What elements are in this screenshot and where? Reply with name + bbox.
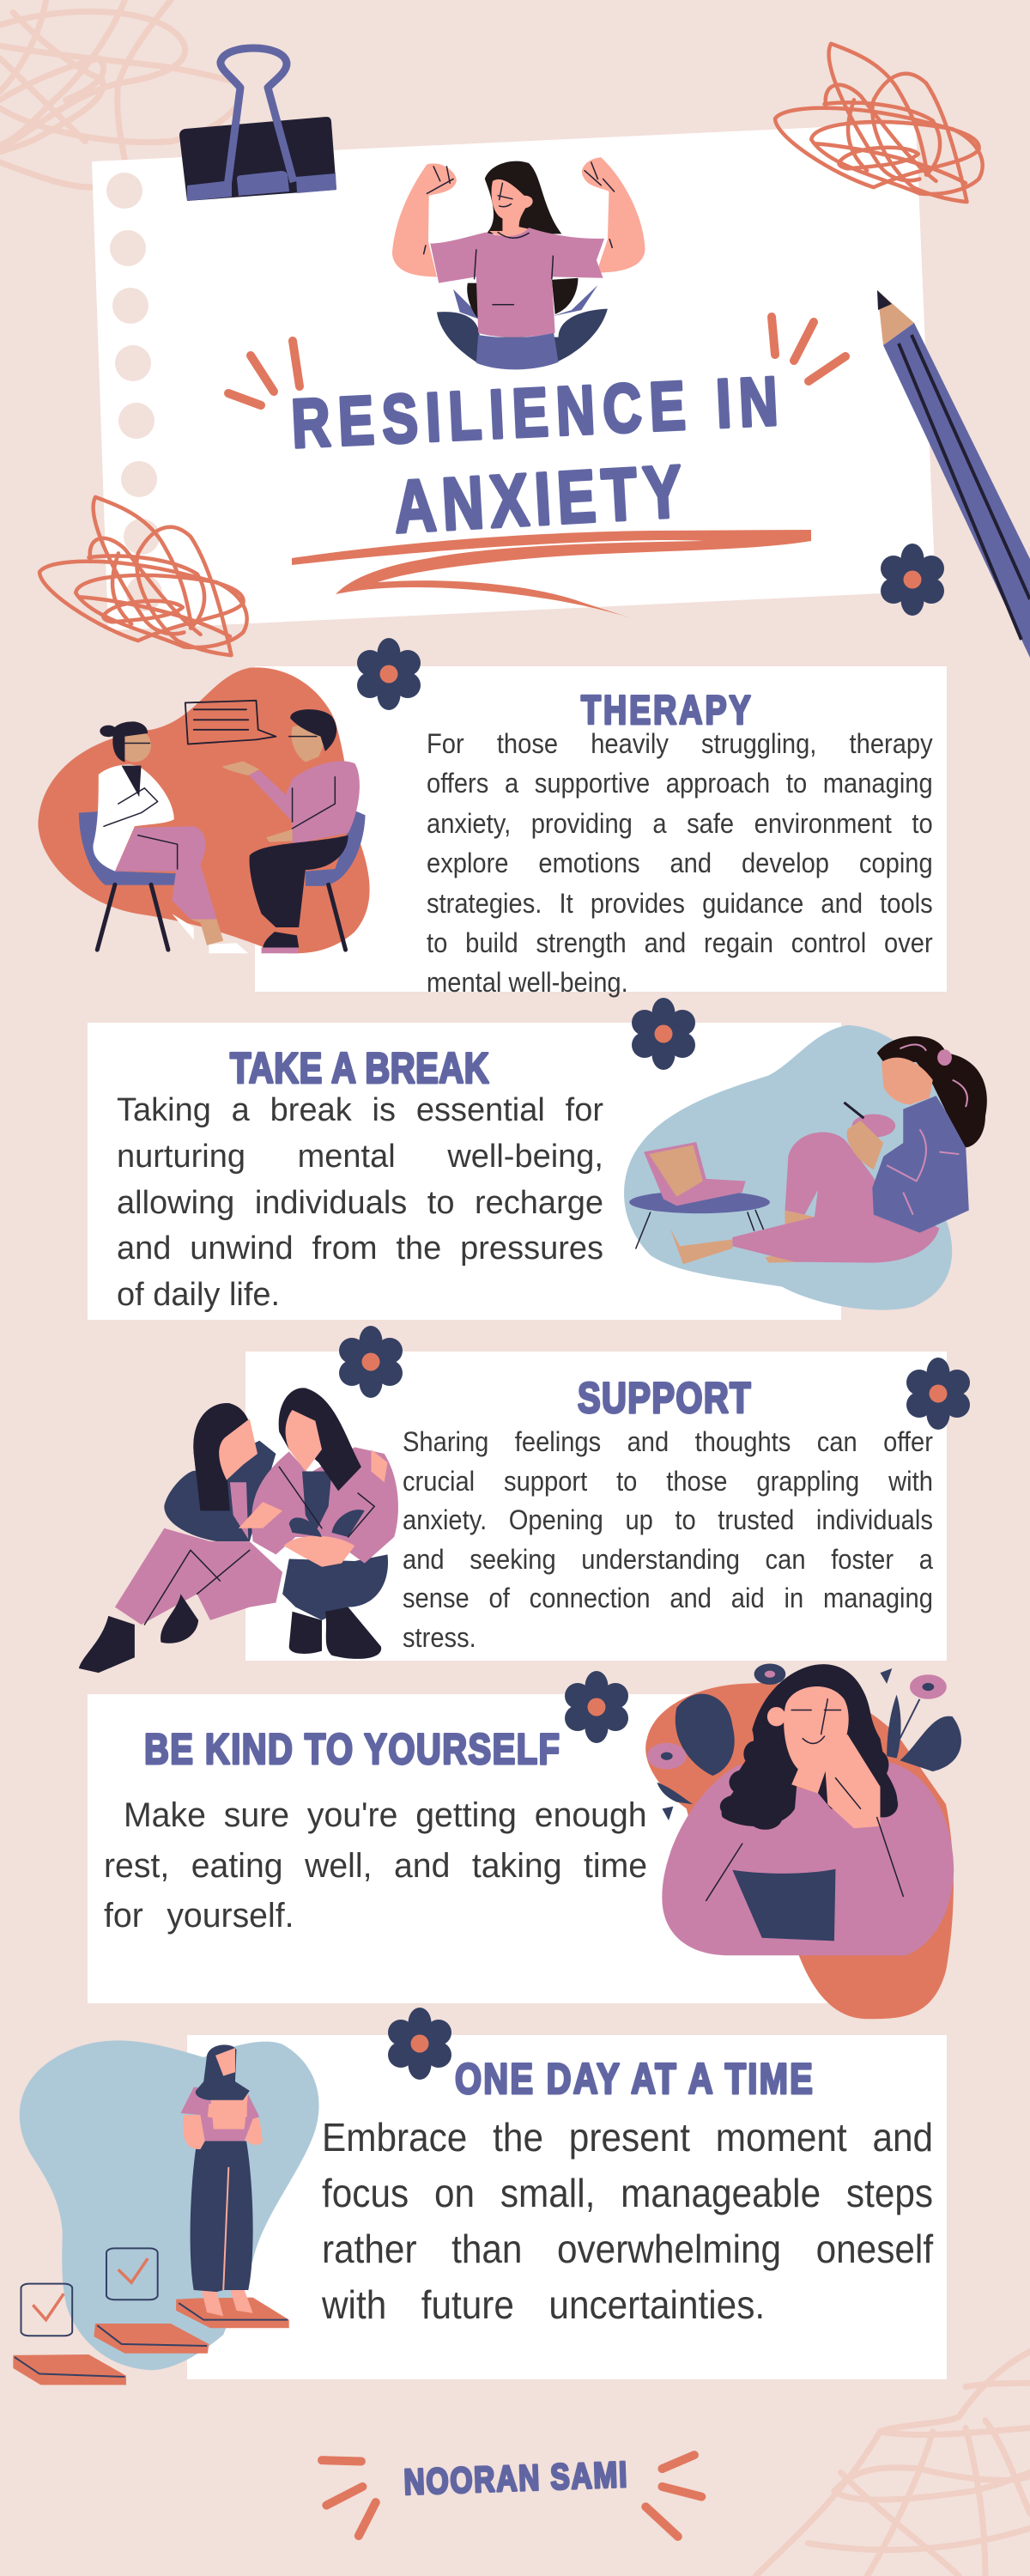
text block: take a break: Taking a break is essential for [117,1092,603,1128]
text block: take a break: nurturing mental well-being, [117,1139,603,1175]
text block: take a break: of daily life. [117,1277,280,1313]
text block: support: Sharing feelings and thoughts can offer [403,1426,933,1457]
text block: support: and seeking understanding can foster a [403,1544,933,1575]
icon: flexing woman [392,157,645,369]
icon: flower support right [906,1358,970,1430]
text block: take a break: and unwind from the pressures [117,1230,603,1267]
panel: be kind to yourself [88,1663,961,2019]
illustration: therapy session [38,667,370,953]
text block: support: anxiety. Opening up to trusted individuals [403,1504,933,1535]
text block: support: stress. [403,1622,476,1653]
icon: pencil [877,290,1030,658]
text block: one day at a time: rather than overwhelming oneself [322,2227,933,2271]
decorative scribble: top left [0,0,239,187]
text block: be kind to yourself: for yourself. [104,1897,294,1935]
text block: one day at a time: Embrace the present moment and [322,2115,933,2160]
text block: be kind to yourself [104,1790,653,1953]
panel: title paper [92,123,936,630]
title underline brush stroke [292,530,811,620]
decorative scribble: bottom right [755,2352,1030,2576]
icon: binder clip [179,48,336,201]
text block: therapy: For those heavily struggling, therapy [427,728,933,759]
icon: flower support left [339,1326,403,1398]
text block: therapy [427,724,942,1007]
illustration: woman with flowers [645,1663,961,2019]
title: ANXIETY [392,450,684,549]
heading: take a break: TAKE A BREAK [230,1044,489,1092]
text block: take a break [117,1088,615,1328]
illustration: two friends sitting [79,1388,398,1673]
text block: support: sense of connection and aid in managing [403,1583,933,1613]
heading: be kind to yourself: BE KIND TO YOURSELF [144,1725,560,1773]
decorative scribble: lower left of paper [39,497,247,655]
title: RESILIENCE IN [290,363,779,463]
panel: support [79,1352,947,1673]
panel: one day at a time [13,2035,947,2385]
text block: therapy: anxiety, providing a safe environment to [427,808,933,839]
text block: one day at a time: focus on small, manageable steps [322,2171,933,2215]
icon: flower therapy [357,638,421,710]
text block: be kind to yourself: rest, eating well, and taking time [104,1847,647,1885]
footer sparkles [322,2455,701,2537]
title [290,363,779,549]
heading: therapy: THERAPY [581,688,751,733]
text block: support [403,1423,943,1672]
icon: flower one day [388,2008,451,2080]
text block: therapy: offers a supportive approach to managing [427,768,933,799]
icon: flower take a break [632,998,695,1070]
text block: take a break: allowing individuals to recharge [117,1185,603,1221]
text block: therapy: strategies. It provides guidance and tools [427,888,933,919]
text block: be kind to yourself: Make sure you're getting enough [124,1796,647,1834]
panel: therapy [38,666,947,1007]
footer author name: NOORAN SAMI [403,2456,627,2503]
decorative scribble: top right [775,44,983,202]
text block: one day at a time: with future uncertainties. [322,2282,765,2327]
text block: therapy: explore emotions and develop coping [427,848,933,878]
text block: therapy: mental well-being. [427,967,628,998]
text block: support: crucial support to those grappling with [403,1466,933,1497]
title sparkles [228,317,845,405]
text block: one day at a time [322,2110,940,2342]
icon: flower on paper [881,544,944,616]
heading: support: SUPPORT [578,1374,751,1422]
illustration: person relaxing with laptop [624,1025,987,1310]
text block: therapy: to build strength and regain control over [427,927,933,958]
illustration: woman on steps [13,2040,319,2385]
panel: take a break [88,1023,987,1328]
paper punch holes [106,173,162,611]
icon: flower be kind [565,1671,628,1743]
heading: one day at a time: ONE DAY AT A TIME [455,2055,813,2103]
